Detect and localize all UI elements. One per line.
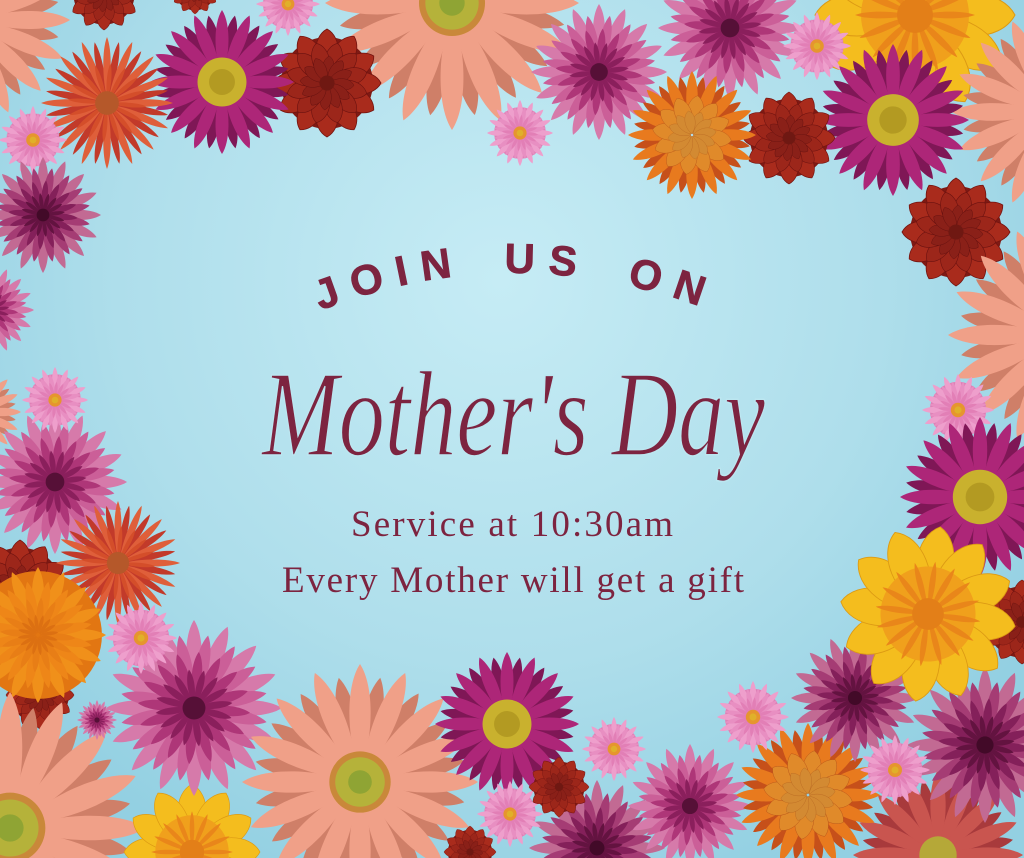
floral border: top edge bbox=[0, 0, 1024, 215]
floral border: bottom edge bbox=[0, 602, 1024, 858]
flower: red top bbox=[68, 0, 140, 30]
flower: pink pom right bbox=[922, 374, 994, 446]
flower: pink pom top centre bbox=[487, 100, 553, 166]
flower: salmon daisy bottom bbox=[235, 657, 485, 858]
floral border: left edge bbox=[0, 106, 186, 729]
flower: pink pom bottom centre bbox=[582, 717, 646, 781]
flower: orange ball left bbox=[0, 567, 106, 703]
flower: pink pom bottom bbox=[477, 781, 543, 847]
flower: magenta daisy top right bbox=[809, 36, 977, 204]
flower: dahlia bottom centre bbox=[628, 744, 752, 858]
flower: yellow marigold bottom bbox=[124, 784, 260, 858]
flower: red ranunculus top right bbox=[743, 92, 835, 184]
flower: salmon daisy top centre bbox=[318, 0, 586, 137]
flower: pink pom top right bbox=[783, 12, 851, 80]
flower: large pink dahlia bbox=[106, 620, 282, 796]
flower: pink pom top bbox=[256, 0, 320, 36]
flower: salmon daisy left edge bbox=[0, 363, 24, 461]
flower: dark dahlia top bbox=[658, 0, 802, 100]
flower: magenta daisy bottom bbox=[428, 645, 586, 803]
flower: pink pom bottom right bbox=[717, 681, 789, 753]
title: Mother's Day: Mother's Day bbox=[260, 347, 766, 482]
flower: red bottom bbox=[444, 826, 496, 858]
flower: dark dahlia lower right bbox=[791, 634, 919, 762]
flower: spiky red-orange top left bbox=[34, 30, 180, 176]
flower: yellow marigold right bbox=[829, 515, 1024, 713]
flower: pink dahlia top bbox=[531, 4, 667, 140]
flower: pink pom left bbox=[22, 367, 88, 433]
flower: red small top bbox=[171, 0, 219, 14]
flower: red bud bbox=[529, 757, 589, 817]
flower: salmon-red daisy bottom right bbox=[848, 765, 1024, 858]
flower: salmon daisy top-left bbox=[0, 0, 76, 126]
floral border: right edge bbox=[829, 178, 1024, 713]
flower: pink pom lower left bbox=[105, 602, 177, 674]
flower: magenta daisy right bbox=[892, 409, 1024, 585]
flower: purple dahlia bottom bbox=[529, 780, 665, 858]
flower: orange mum bottom bbox=[730, 717, 886, 858]
flower: dahlia upper left bbox=[0, 157, 101, 273]
flower: dahlia left bbox=[0, 410, 127, 554]
flower: pink pom upper left bbox=[0, 106, 67, 174]
flower: salmon daisy right top bbox=[947, 9, 1024, 215]
flower: dark red right bbox=[980, 580, 1024, 664]
flower: small pink dahlia bbox=[77, 700, 117, 740]
text: service time: Service at 10:30am bbox=[351, 504, 673, 545]
flower: dark red lower bbox=[6, 661, 74, 729]
flower: salmon daisy corner bbox=[0, 684, 154, 858]
flower: magenta daisy top left bbox=[143, 3, 301, 161]
flower: spiky red-orange left bbox=[50, 495, 186, 631]
flower: salmon daisy right bbox=[942, 217, 1024, 453]
flower: dark dahlia right bbox=[907, 667, 1024, 823]
flower: red ranunculus top left bbox=[273, 29, 381, 137]
text: gift note: Every Mother will get a gift bbox=[282, 560, 745, 601]
flower: red ranunculus right bbox=[902, 178, 1010, 286]
flower: yellow marigold top right bbox=[815, 0, 1015, 115]
flower: dahlia left edge bbox=[0, 266, 34, 354]
flower: pink pom lower right bbox=[860, 735, 930, 805]
heading: join us on: JOIN US ON bbox=[318, 244, 706, 308]
flower: orange mum top bbox=[623, 66, 761, 204]
flower: dark red behind bbox=[0, 540, 70, 640]
